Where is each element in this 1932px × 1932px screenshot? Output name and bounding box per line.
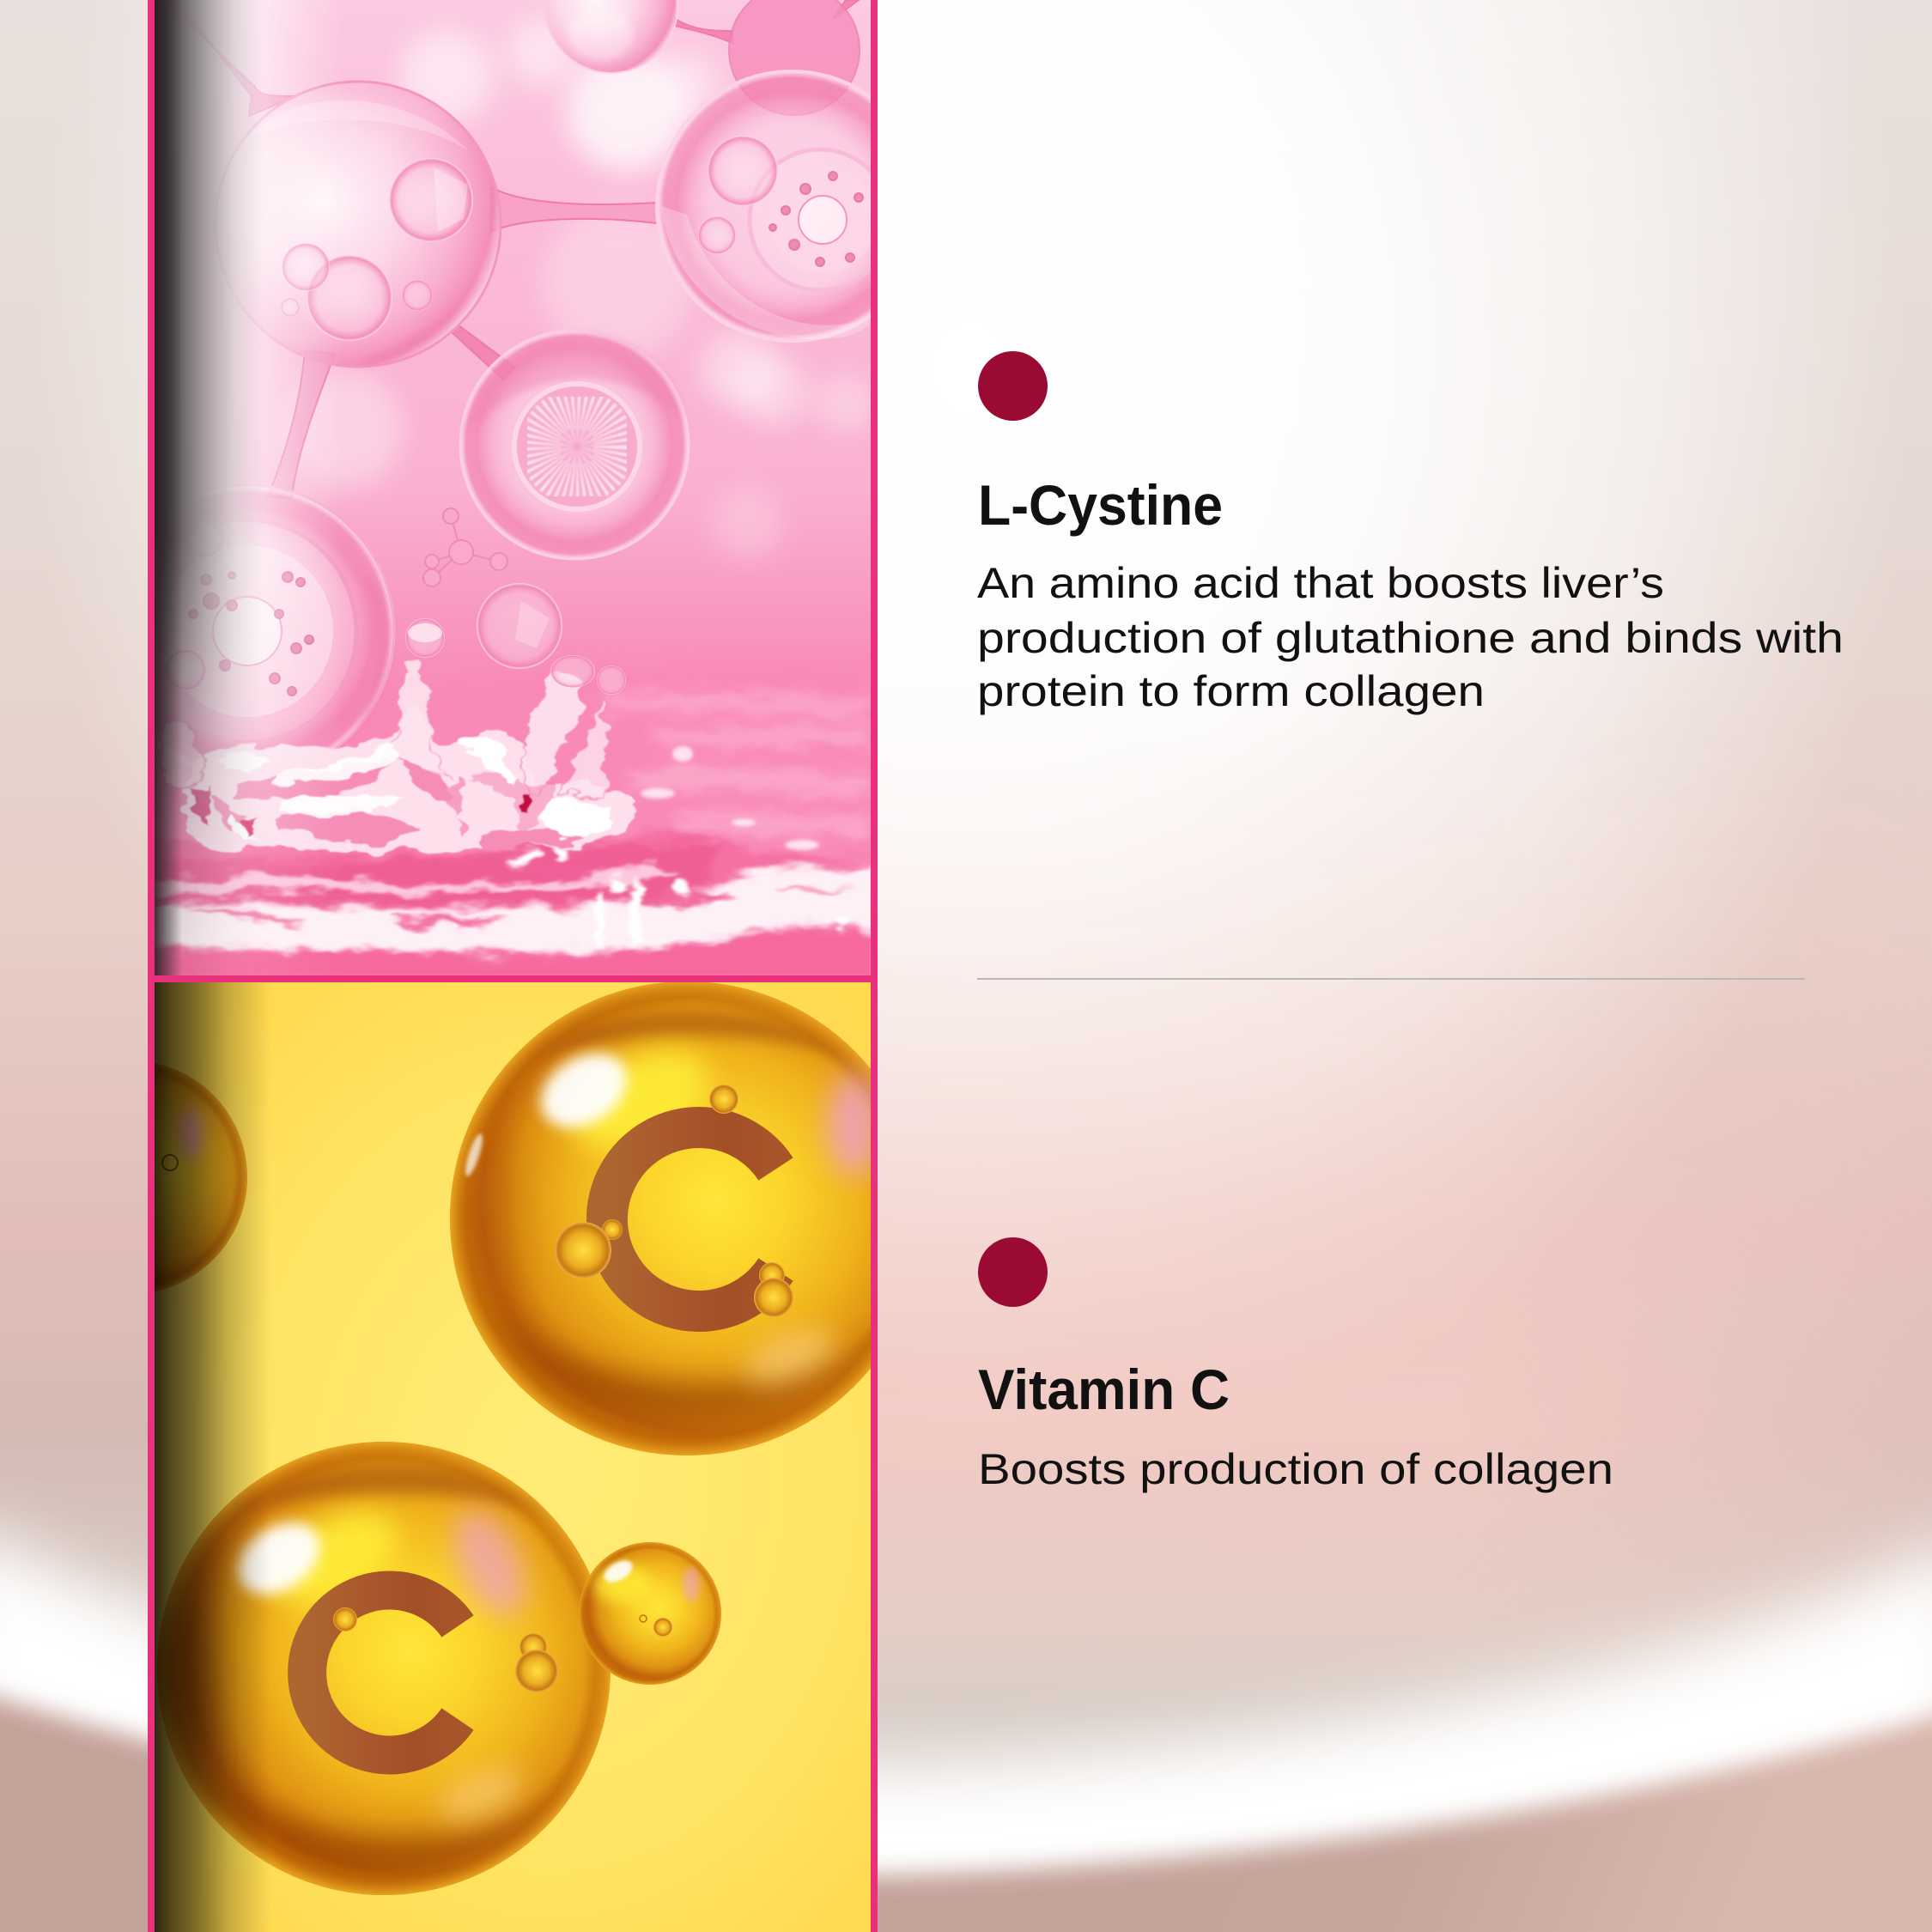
text block: Vitamin C description: Boosts production of collagen [978,1445,1613,1493]
molecule: lower left bubble with atoms [102,485,394,777]
text block: L-Cystine description [977,559,1844,715]
letter C mark, top sphere [607,1127,776,1311]
connector bars between molecules [163,0,859,498]
small molecule [423,508,507,586]
panel: L-Cystine image, pink molecules and splash [155,0,871,975]
molecule: large bubble [216,82,501,367]
molecule: right bubble with cell [657,71,927,341]
heading: L-Cystine: L-Cystine [978,473,1223,537]
tiny bubbles, lower sphere [333,1607,558,1692]
panel frame: pink border and divider [148,0,878,1932]
sphere: lower vitamin C [157,1442,611,1895]
bokeh lights [283,17,876,560]
sphere: small floating [579,1542,721,1685]
icon: dot, L-Cystine [978,351,1048,421]
molecule: top right bubble [729,0,860,115]
section: L-Cystine [977,351,1844,715]
section: Vitamin C [978,1237,1613,1493]
free bubble [477,583,562,669]
left edge shadow [155,0,182,975]
divider line [977,978,1805,980]
left shadow on yellow image [155,982,270,1932]
splash droplets at column tips [405,618,626,695]
text block: L-Cystine description: An amino acid that boosts liver’s [977,559,1664,607]
water splash [163,661,635,851]
molecule: top bubble [545,0,677,73]
letter C mark, lower sphere [307,1590,458,1755]
heading: Vitamin C: Vitamin C [978,1358,1230,1421]
left shadow on pink image [155,0,343,975]
icon: dot, Vitamin C [978,1237,1048,1307]
molecule: centre bubble with urchin cell [460,331,689,559]
text block: L-Cystine description: production of glutathione and binds with [977,614,1844,662]
sphere: top vitamin C [450,981,924,1455]
text block: L-Cystine description: protein to form collagen [977,667,1485,715]
panel: Vitamin C image, golden spheres [14,981,924,1932]
left partial sphere [14,1060,247,1294]
water surface [155,687,871,975]
tiny bubbles, top sphere [555,1084,793,1317]
water droplets [641,746,819,850]
